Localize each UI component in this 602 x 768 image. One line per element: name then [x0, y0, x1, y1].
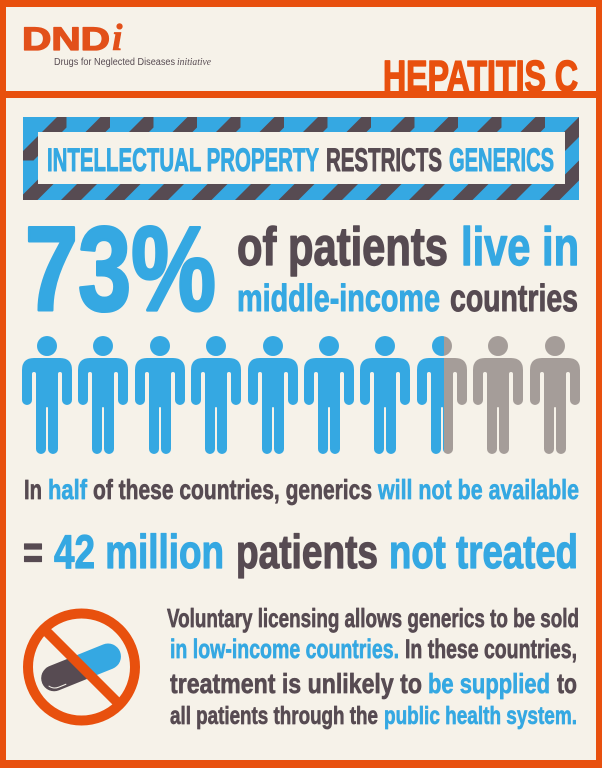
banner: striped title: INTELLECTUAL PROPERTY: [47, 142, 319, 178]
person 1: [22, 336, 72, 454]
text: 42 million not treated: 42 million: [54, 525, 224, 578]
logo: DNDi: initiative: [177, 57, 212, 68]
person 10: [530, 336, 580, 454]
statistic caption: middle-income: [237, 278, 440, 320]
person 9: [473, 336, 523, 454]
text: 42 million not treated: [23, 525, 578, 578]
person 4: [191, 336, 241, 454]
text: generics availability: [24, 474, 579, 505]
text block: voluntary licensing: be supplied: [428, 668, 550, 699]
banner: striped title: [23, 117, 579, 200]
logo: DNDi: Drugs for Neglected Diseases: [54, 57, 175, 68]
text: generics availability: In: [24, 474, 42, 505]
pictogram: 10 people, 7.3 coloured: [22, 336, 580, 454]
person 3: [135, 336, 185, 454]
text: generics availability: half: [48, 474, 88, 505]
text block: voluntary licensing: all patients through the: [170, 702, 378, 730]
logo: DNDi: DND: [22, 21, 110, 57]
text block: voluntary licensing: to: [557, 668, 577, 699]
text: 42 million not treated: =: [23, 526, 43, 578]
text block: voluntary licensing: treatment is unlikely to: [170, 668, 422, 699]
person 6: [304, 336, 354, 454]
person 7: [360, 336, 410, 454]
text block: voluntary licensing: [167, 603, 579, 730]
person 8, partly coloured: [417, 336, 467, 454]
person 5: [248, 336, 298, 454]
text: generics availability: of these countries, generics: [93, 474, 372, 505]
person 2: [78, 336, 128, 454]
statistic caption: of patients: [237, 217, 448, 277]
text block: voluntary licensing: in low-income countries.: [170, 634, 399, 664]
banner: striped title: RESTRICTS: [326, 142, 442, 178]
logo: DNDi: [22, 17, 212, 68]
statistic caption: [237, 217, 579, 320]
text: 42 million not treated: patients: [236, 525, 378, 578]
logo: DNDi: i: [112, 17, 123, 59]
icon: prohibited pill: [28, 614, 135, 720]
big statistic: 73%: 73%: [25, 202, 216, 336]
